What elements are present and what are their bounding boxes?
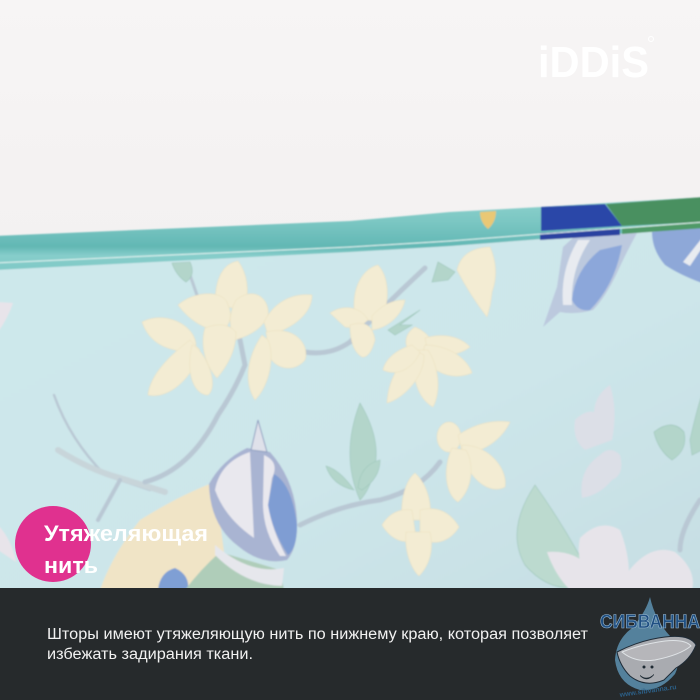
butterfly <box>574 385 621 498</box>
white face <box>215 452 254 538</box>
logo: IDDIS: iDDiS <box>538 38 649 87</box>
background: white wall <box>0 0 700 240</box>
green print section <box>606 197 700 226</box>
body <box>100 482 225 590</box>
bath face <box>640 666 654 679</box>
flowers <box>142 247 510 576</box>
heading: Утяжеляющая нить: нить <box>44 553 98 578</box>
wing <box>158 568 188 590</box>
chest <box>185 552 284 590</box>
heading: Утяжеляющая нить: Утяжеляющая <box>44 521 208 546</box>
third bird <box>652 226 700 283</box>
photo: curtain fabric with botanical print <box>0 197 700 590</box>
hem band <box>0 197 700 270</box>
website: www.sibvanna.ru <box>618 684 677 699</box>
magnolia flower <box>547 526 693 590</box>
description text: избежать задирания ткани. <box>47 646 253 663</box>
main bird <box>100 420 297 590</box>
stitching <box>0 222 700 263</box>
panel: dark description bar <box>0 588 700 700</box>
second bird <box>543 233 637 327</box>
fabric background <box>0 226 700 590</box>
water drop <box>615 597 679 690</box>
bath rim <box>622 641 691 661</box>
leaves <box>172 262 700 588</box>
cheek <box>268 474 297 555</box>
logo: Сибванна watermark <box>600 597 700 699</box>
beak <box>251 420 267 452</box>
pink circle badge <box>15 506 91 582</box>
branches <box>54 268 700 550</box>
neck collar <box>215 545 284 586</box>
blue print section <box>541 204 622 231</box>
head bands <box>209 448 297 561</box>
yellow print spot <box>480 211 496 229</box>
description text: Шторы имеют утяжеляющую нить по нижнему краю, которая позволяет <box>47 626 588 643</box>
left edge petals <box>0 302 16 562</box>
bathtub <box>617 636 696 683</box>
